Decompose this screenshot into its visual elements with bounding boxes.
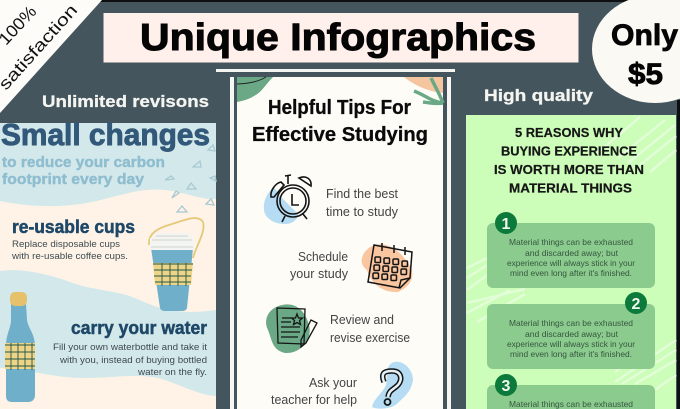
price badge: Only $5: $5 [628, 58, 663, 91]
tip 4: ask teacher: teacher for help [271, 393, 357, 407]
tip 2: schedule: Schedule [298, 250, 348, 264]
tip 2: schedule: your study [290, 267, 349, 281]
panel: helpful tips [230, 77, 451, 409]
subheading: to reduce your carbon footprint every day [2, 154, 165, 188]
tip 1: best time: Find the best [326, 187, 399, 201]
heading: 5 reasons why buying experience: 5 REASONS WHY [515, 126, 624, 140]
icon: document and pencil [266, 304, 317, 353]
tip: re-usable cups [11, 217, 135, 261]
tip 4: ask teacher: Ask your [309, 376, 357, 390]
price badge: Only $5 [592, 0, 680, 103]
heading: 5 reasons why buying experience: IS WORTH MORE THAN [494, 163, 644, 177]
tip: re-usable cups: with re-usable coffee cups. [11, 251, 128, 261]
tip: carry your water: carry your water [71, 318, 207, 338]
reason card 2: experience will always stick in your [507, 339, 635, 349]
reason card 1: and discarded away; but [525, 248, 619, 258]
reason card 3: Material things can be exhausted [509, 399, 633, 409]
heading: 5 reasons why buying experience: BUYING EXPERIENCE [501, 144, 637, 158]
panel: 5 reasons [466, 115, 676, 409]
reason card 2: Material things can be exhausted [509, 318, 633, 328]
label: Unlimited revisons: Unlimited revisons [42, 92, 209, 111]
label: High quality: High quality [484, 86, 594, 105]
tip: carry your water: with you, instead of buying bottled [59, 355, 207, 365]
icon: water bottle [5, 292, 35, 402]
tip 2: schedule [290, 250, 349, 281]
reason card 2 [487, 292, 655, 369]
heading: Small changes: Small changes [1, 117, 210, 152]
subheading: to reduce your carbon footprint every day: footprint every day [2, 171, 145, 188]
tip: re-usable cups: Replace disposable cups [12, 239, 121, 249]
reason card 2: and discarded away; but [525, 329, 619, 339]
reason card 3: 3 [502, 378, 511, 395]
tip: carry your water: water on the fly. [137, 367, 207, 377]
tip 3: review [330, 313, 410, 345]
reason card 1: experience will always stick in your [507, 258, 635, 268]
reason card 1: Material things can be exhausted [509, 237, 633, 247]
reason card 2: mind even long after it's finished. [510, 349, 632, 359]
panel: small changes [0, 117, 216, 409]
icon: calendar [362, 243, 412, 292]
reason card 1: mind even long after it's finished. [510, 268, 632, 278]
tip: carry your water [53, 318, 208, 377]
tip: carry your water: Fill your own waterbottle and take it [53, 342, 208, 352]
subheading: to reduce your carbon footprint every day: to reduce your carbon [2, 154, 165, 171]
tip 1: best time: time to study [326, 205, 399, 219]
tip: re-usable cups: re-usable cups [12, 217, 135, 237]
tip 4: ask teacher [271, 376, 357, 407]
tip 3: review: revise exercise [330, 331, 410, 345]
title banner [104, 13, 578, 62]
icon: question mark [372, 362, 413, 409]
icon: reusable coffee cup [149, 218, 204, 311]
reason card 3 [487, 374, 655, 409]
heading: Helpful Tips For Effective Studying [252, 97, 428, 146]
title banner: Unique Infographics [140, 17, 536, 59]
tip 3: review: Review and [330, 313, 394, 327]
reason card 2: 2 [632, 296, 641, 313]
heading: Helpful Tips For Effective Studying: Helpful Tips For [268, 97, 411, 119]
reason card 1 [487, 212, 655, 288]
corner ribbon: 100% satisfaction [0, 0, 102, 113]
white rule above centre panel [216, 69, 455, 72]
icon: alarm clock [264, 175, 311, 224]
price badge: Only $5: Only [611, 19, 678, 52]
decoration: top corners [237, 77, 443, 103]
heading: 5 reasons why buying experience [494, 126, 644, 196]
reason card 1: 1 [502, 216, 511, 233]
heading: Helpful Tips For Effective Studying: Effective Studying [252, 124, 428, 146]
heading: 5 reasons why buying experience: MATERIAL THINGS [509, 182, 632, 196]
tip 1: best time [326, 187, 399, 219]
